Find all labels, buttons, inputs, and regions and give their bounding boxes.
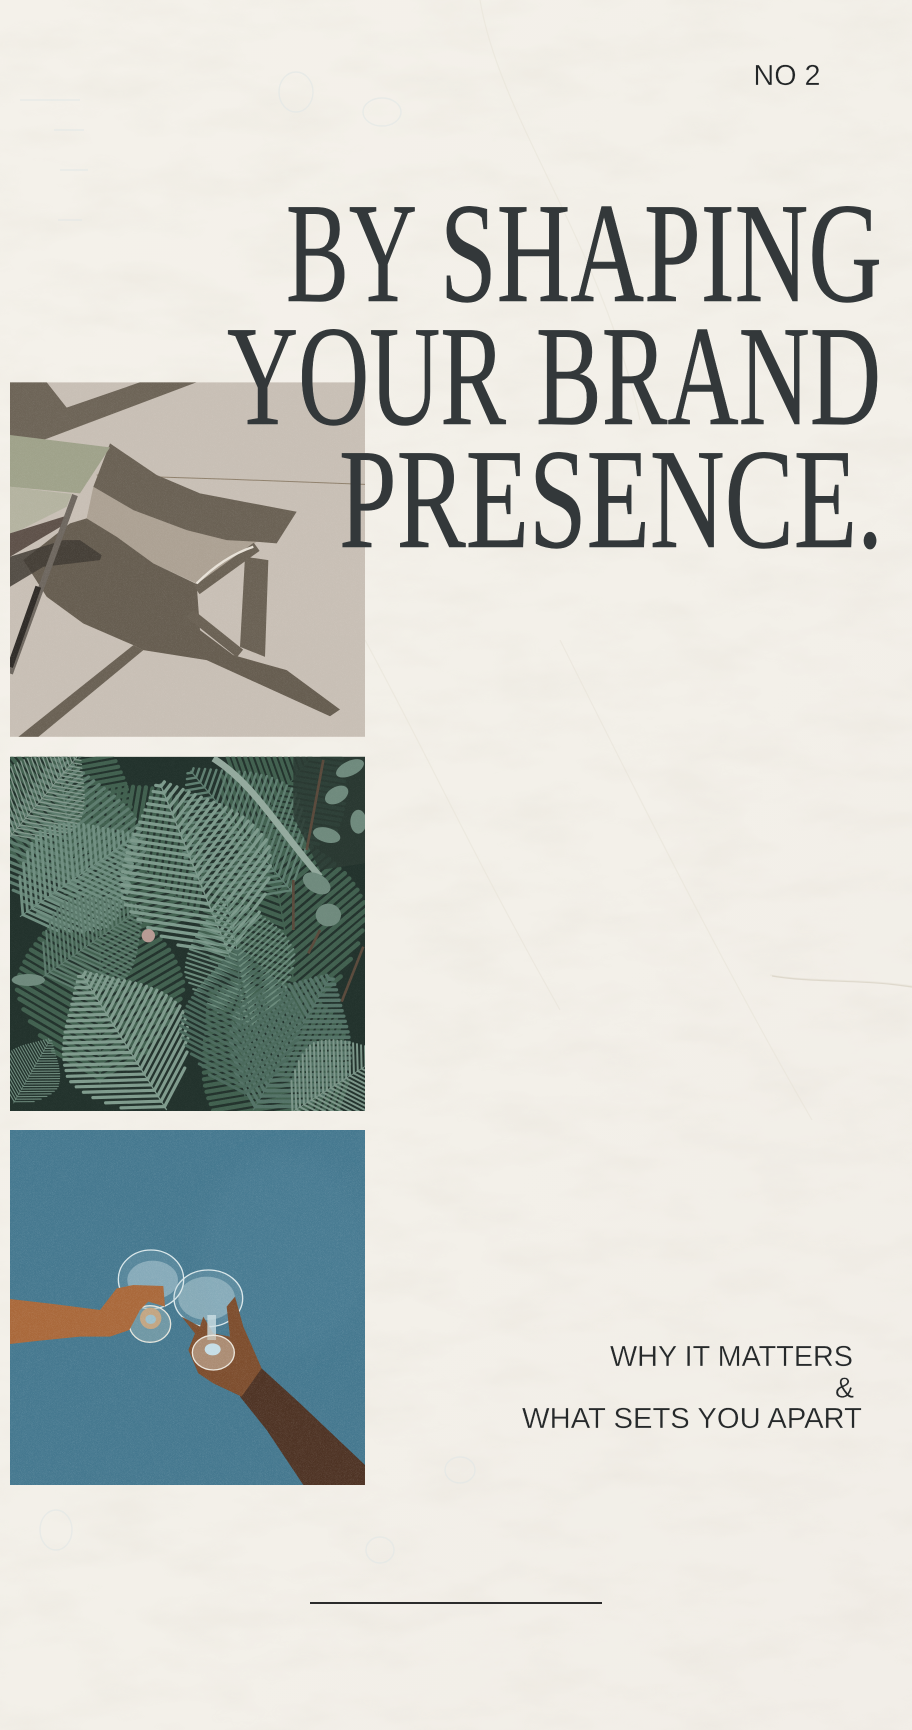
heading bbox=[227, 174, 883, 578]
shadow: top left strip bbox=[10, 382, 197, 440]
footer rule bbox=[310, 1602, 602, 1604]
frond: far top right bbox=[140, 728, 344, 936]
frond: upper left bbox=[0, 748, 157, 947]
left glass bowl bbox=[118, 1250, 184, 1309]
photo: toasting glasses on blue bbox=[10, 1130, 365, 1485]
subheading text: WHY IT MATTERS bbox=[610, 1341, 853, 1373]
right glass bowl bbox=[174, 1270, 243, 1327]
pale arching stem bbox=[213, 758, 320, 877]
frond: mid left bbox=[15, 867, 170, 1017]
shadow: chair seat band bbox=[93, 443, 297, 543]
frond: lower left bbox=[26, 939, 223, 1145]
subheading text: & bbox=[835, 1372, 854, 1404]
pink dried bud bbox=[142, 929, 155, 942]
photo: chair and shadow bbox=[10, 382, 365, 737]
label: issue number: NO 2 bbox=[754, 60, 820, 92]
subheading text: WHAT SETS YOU APART bbox=[522, 1403, 862, 1435]
right hand bbox=[182, 1297, 262, 1397]
crack line in concrete bbox=[97, 475, 365, 484]
right arm bbox=[240, 1368, 365, 1485]
leaves at right bbox=[12, 755, 367, 986]
frond: bottom right fan bbox=[198, 945, 385, 1142]
left arm and hand bbox=[10, 1285, 165, 1344]
frond: bottom right pale bbox=[265, 1013, 411, 1153]
lit seat patch bbox=[87, 487, 257, 583]
dark foliage top right bbox=[293, 757, 365, 870]
underlayer of foliage bbox=[0, 685, 393, 1183]
brown stems bbox=[293, 760, 363, 1002]
frond: top left fan bbox=[0, 727, 112, 865]
heading: BY bbox=[286, 174, 417, 332]
subheading text bbox=[522, 1341, 862, 1435]
frond: lower centre bbox=[177, 947, 306, 1100]
frond: central lower layer bbox=[171, 885, 307, 1038]
frond: central large bbox=[88, 755, 302, 986]
heading: YOUR bbox=[227, 297, 506, 455]
shadow: lower strip bbox=[18, 645, 143, 737]
chair fabric bbox=[10, 435, 110, 493]
chair arm and legs bbox=[10, 515, 68, 557]
frond: left arc bbox=[0, 789, 168, 964]
photo: palm fronds bbox=[10, 756, 365, 1111]
shadow: chair body bbox=[23, 518, 340, 716]
shadow: right leg and cross bars bbox=[240, 557, 268, 657]
left glass foot bbox=[129, 1306, 171, 1342]
frond: bottom left small bbox=[0, 1025, 76, 1119]
right glass foot bbox=[192, 1315, 234, 1370]
